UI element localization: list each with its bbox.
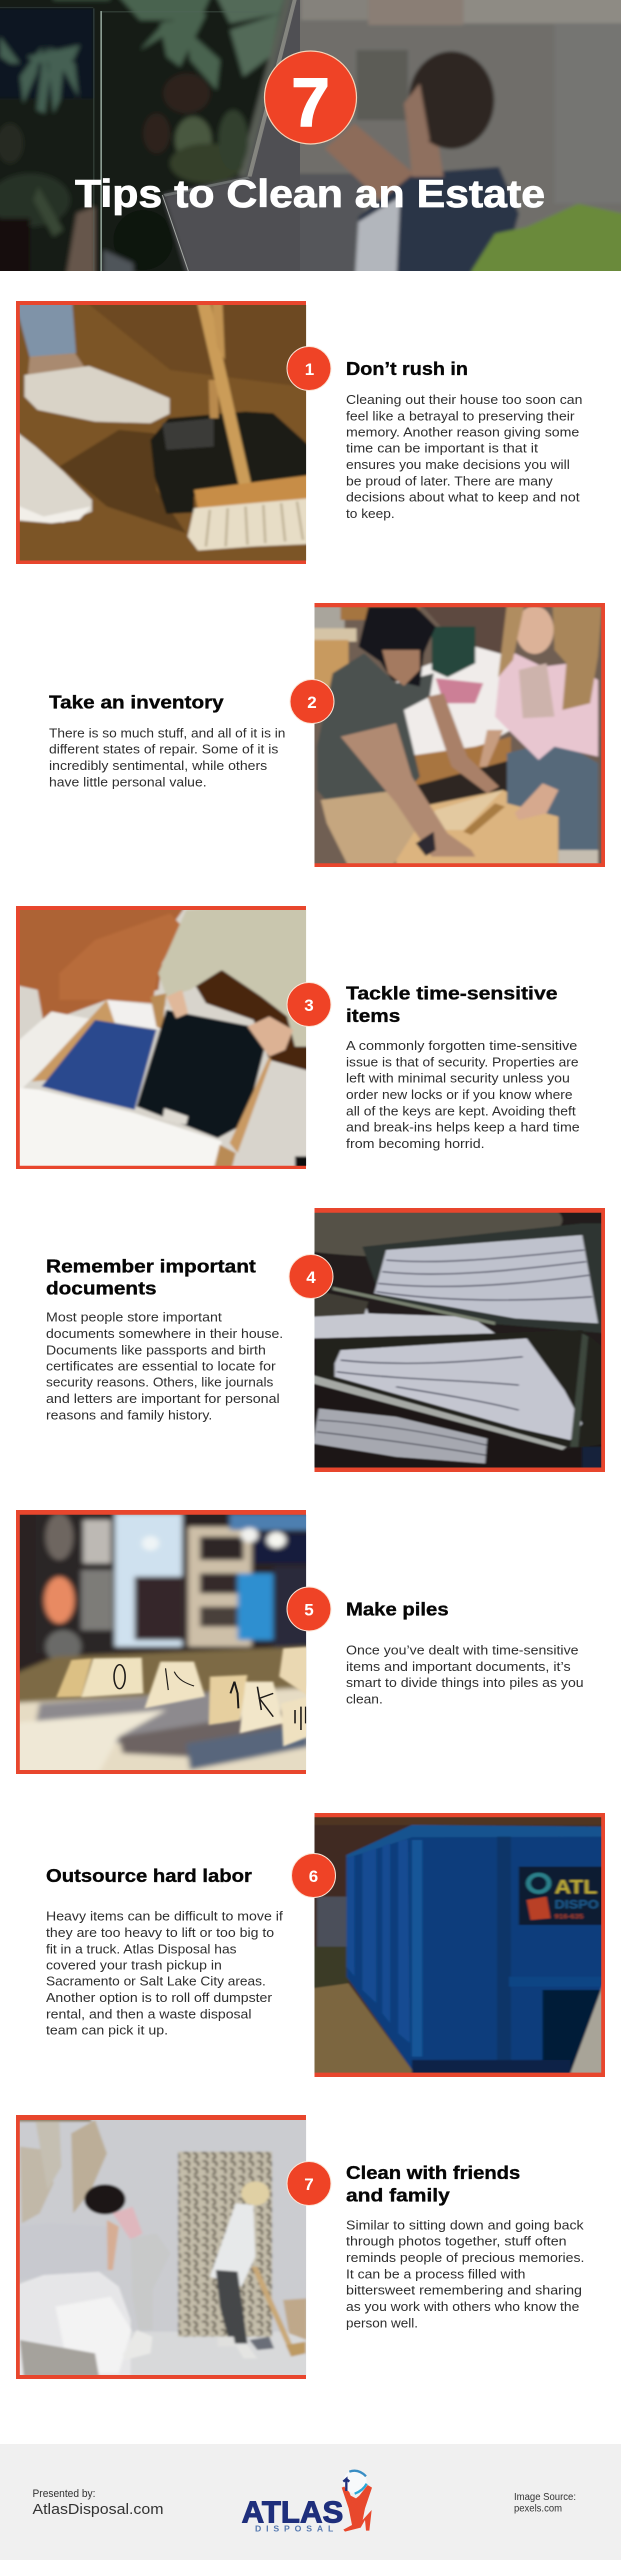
number badge: 7 — [264, 51, 356, 144]
body text — [49, 725, 285, 789]
body text: A commonly forgotten time-sensitive — [346, 1038, 577, 1053]
photo frame: broom and dustpan — [0, 290, 329, 576]
panel: tip 5 make piles — [8, 1503, 584, 1783]
body text: from becoming horrid. — [346, 1136, 485, 1151]
body text: rental, and then a waste disposal — [46, 2006, 252, 2021]
body text: fit in a truck. Atlas Disposal has — [46, 1941, 237, 1956]
heading: Don’t rush in — [346, 358, 468, 379]
number badge: 3 — [287, 982, 331, 1026]
image source credit: pexels.com — [514, 2503, 562, 2515]
body text: covered your trash pickup in — [46, 1957, 222, 1972]
photo frame: blue dumpster — [301, 1807, 618, 2083]
number badge: 7: 7 — [304, 2175, 314, 2194]
number badge: 2: 2 — [307, 693, 317, 712]
panel: tip 2 take an inventory — [49, 597, 618, 877]
body text — [346, 1643, 584, 1706]
presented by credit: AtlasDisposal.com — [32, 2501, 164, 2518]
body text: and letters are important for personal — [46, 1391, 280, 1406]
body text — [346, 2217, 584, 2330]
heading: Remember important — [46, 1255, 256, 1276]
body text — [346, 1038, 580, 1151]
body text: reasons and family history. — [46, 1407, 212, 1422]
body text: It can be a process filled with — [346, 2266, 525, 2281]
number badge: 4 — [289, 1254, 333, 1298]
image source credit — [514, 2491, 576, 2515]
number badge: 5 — [287, 1587, 331, 1631]
body text: through photos together, stuff often — [346, 2234, 567, 2249]
heading: Take an inventory — [49, 691, 224, 712]
number badge: 7 — [287, 2162, 331, 2206]
main title: Tips to Clean an Estate — [75, 173, 545, 216]
photo frame: stacked binders of paper — [230, 1183, 618, 1480]
photo frame: blue dumpster: DISPO — [554, 1897, 599, 1911]
body text: reminds people of precious memories. — [346, 2250, 584, 2265]
body text: Documents like passports and birth — [46, 1342, 266, 1357]
logo: Atlas Disposal — [242, 2470, 372, 2534]
body text: team can pick it up. — [46, 2023, 168, 2038]
photo frame: blue dumpster: 916-635 — [554, 1912, 583, 1920]
body text: ensures you make decisions you will — [346, 457, 570, 472]
panel: tip 6 outsource hard labor — [46, 1807, 618, 2083]
body text — [46, 1909, 283, 2038]
icon: figure holding a recycling globe — [342, 2470, 372, 2532]
header banner — [0, 0, 621, 287]
number badge: 6: 6 — [309, 1867, 318, 1886]
body text: Cleaning out their house too soon can — [346, 392, 582, 407]
body text: clean. — [346, 1691, 383, 1706]
logo: Atlas Disposal: ATLAS — [242, 2495, 343, 2529]
number badge: 1 — [287, 346, 331, 390]
footer — [0, 2444, 621, 2560]
body text: left with minimal security unless you — [346, 1071, 570, 1086]
number badge: 2 — [290, 680, 334, 724]
body text: bittersweet remembering and sharing — [346, 2283, 582, 2298]
number badge: 6 — [292, 1854, 336, 1898]
body text: Most people store important — [46, 1310, 222, 1325]
body text: smart to divide things into piles as you — [346, 1675, 584, 1690]
image source credit: Image Source: — [514, 2491, 576, 2503]
body text: documents somewhere in their house. — [46, 1326, 283, 1341]
body text: issue is that of security. Properties are — [346, 1054, 578, 1069]
header photo: man cleaning a window beside plants — [0, 0, 621, 287]
heading: items — [346, 1005, 400, 1026]
heading: Tackle time-sensitive — [346, 983, 558, 1004]
panel: tip 1 don't rush in — [0, 290, 582, 576]
presented by credit: Presented by: — [32, 2488, 96, 2500]
body text: different states of repair. Some of it is — [49, 742, 279, 757]
body text: they are too heavy to lift or too big to — [46, 1925, 274, 1940]
heading: and family — [346, 2185, 451, 2206]
body text: decisions about what to keep and not — [346, 490, 580, 505]
heading — [346, 983, 558, 1026]
body text: have little personal value. — [49, 774, 207, 789]
heading: Make piles — [346, 1598, 449, 1619]
body text: Once you’ve dealt with time-sensitive — [346, 1643, 578, 1658]
number badge: 3: 3 — [304, 996, 314, 1015]
body text: person well. — [346, 2315, 418, 2330]
body text: There is so much stuff, and all of it is in — [49, 725, 285, 740]
panel: tip 7 clean with friends and family — [8, 2110, 584, 2385]
photo frame: couple packing a box — [301, 597, 618, 877]
photo frame: blue dumpster: ATL — [554, 1877, 597, 1898]
number badge: 1: 1 — [305, 360, 314, 379]
body text: as you work with others who know the — [346, 2299, 579, 2314]
body text: all of the keys are kept. Avoiding theft — [346, 1103, 576, 1118]
logo: Atlas Disposal: DISPOSAL — [255, 2524, 334, 2534]
body text: memory. Another reason giving some — [346, 425, 579, 440]
heading: Clean with friends — [346, 2162, 520, 2183]
heading: documents — [46, 1278, 156, 1299]
number badge: 7: 7 — [291, 64, 330, 141]
body text: certificates are essential to locate for — [46, 1358, 276, 1373]
body text — [346, 392, 582, 521]
photo frame: labelled record dividers — [8, 1503, 325, 1783]
body text: be proud of later. There are many — [346, 473, 553, 488]
presented by credit — [32, 2488, 164, 2518]
body text: Heavy items can be difficult to move if — [46, 1909, 283, 1924]
heading — [46, 1255, 256, 1299]
body text: and break-ins helps keep a hard time — [346, 1120, 580, 1135]
number badge: 5: 5 — [304, 1600, 314, 1620]
heading — [346, 2162, 520, 2206]
panel: tip 3 tackle time-sensitive items — [8, 900, 580, 1176]
body text: time can be important is that it — [346, 441, 538, 456]
number badge: 4: 4 — [306, 1268, 316, 1287]
body text: Another option is to roll off dumpster — [46, 1990, 273, 2005]
body text: Sacramento or Salt Lake City areas. — [46, 1974, 266, 1989]
panel: tip 4 remember important documents — [46, 1183, 618, 1480]
photo frame: two women tidying a bedroom — [8, 2110, 325, 2385]
heading: Outsource hard labor — [46, 1865, 252, 1886]
body text: to keep. — [346, 506, 395, 521]
body text: security reasons. Others, like journals — [46, 1375, 274, 1390]
body text: Similar to sitting down and going back — [346, 2217, 584, 2232]
body text: feel like a betrayal to preserving their — [346, 408, 575, 423]
body text: incredibly sentimental, while others — [49, 758, 268, 773]
photo frame: folded clothes in a box — [8, 900, 329, 1176]
body text: items and important documents, it’s — [346, 1659, 571, 1674]
body text — [46, 1310, 283, 1422]
body text: order new locks or if you know where — [346, 1087, 572, 1102]
